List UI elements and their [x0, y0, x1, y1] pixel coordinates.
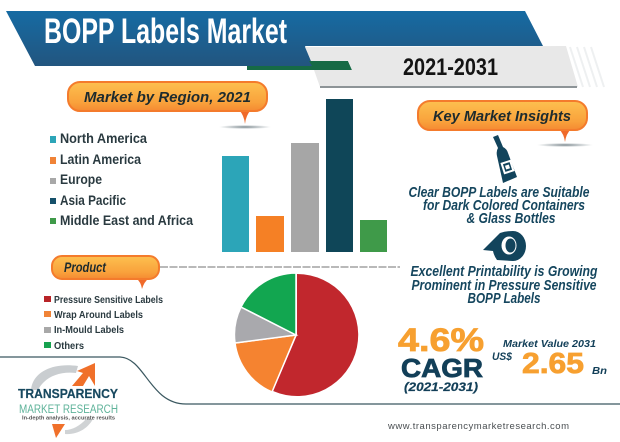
callout: product: Product [64, 259, 107, 275]
date range: 2021-2031 [403, 54, 498, 81]
logo: transparency market research: MARKET RESEARCH [19, 404, 118, 416]
text: insight one [408, 184, 590, 227]
banner: grey date ribbon [305, 46, 578, 87]
logo: transparency market research [18, 363, 118, 438]
legend: regions: North America [60, 130, 147, 146]
legend: product: Others [54, 341, 84, 352]
callout: market by region: Market by Region, 2021 [84, 89, 251, 106]
title: BOPP Labels Market [44, 12, 287, 51]
logo: transparency market research: TRANSPARENCY [18, 386, 118, 401]
icon: tape roll [483, 231, 526, 261]
stat: market value: US$ [492, 351, 513, 363]
stat: CAGR [398, 322, 484, 394]
text: insight one: & Glass Bottles [466, 210, 556, 227]
stat: CAGR: 4.6% [398, 322, 484, 358]
legend: product: Wrap Around Labels [54, 310, 143, 321]
stat: market value: Market Value 2031 [503, 339, 596, 350]
pie chart: product [234, 273, 358, 396]
text: insight one: for Dark Colored Containers [423, 197, 585, 214]
icon: bottle [493, 135, 517, 183]
legend: product [44, 295, 163, 352]
bar chart: market by region [222, 99, 387, 252]
text: insight two: BOPP Labels [468, 290, 540, 307]
legend: regions [50, 130, 193, 228]
text: insight two [410, 263, 598, 307]
legend: regions: Asia Pacific [60, 192, 126, 208]
legend: regions: Latin America [60, 151, 141, 167]
callout: market by region [68, 82, 271, 129]
legend: product: In-Mould Labels [54, 325, 124, 336]
banner: green strip [247, 61, 352, 70]
banner: blue ribbon [6, 11, 543, 66]
stat: market value: 2.65 [522, 348, 584, 380]
stat: market value [492, 339, 607, 380]
stat: CAGR: (2021-2031) [404, 380, 478, 394]
banner: ribbon shadow [320, 86, 577, 88]
stat: CAGR: CAGR [401, 353, 483, 383]
legend: regions: Middle East and Africa [60, 212, 193, 228]
legend: regions: Europe [60, 171, 102, 187]
callout: key market insights [418, 101, 593, 147]
banner: fading stripes [570, 47, 604, 87]
website url: www.transparencymarketresearch.com [387, 421, 569, 432]
logo: transparency market research: In-depth analysis, accurate results [22, 416, 115, 422]
stat: market value: Bn [592, 366, 607, 377]
title banner [6, 11, 604, 88]
callout: product [52, 256, 159, 289]
divider curve [0, 357, 620, 404]
legend: product: Pressure Sensitive Labels [54, 295, 163, 306]
callout: key market insights: Key Market Insights [433, 108, 571, 125]
